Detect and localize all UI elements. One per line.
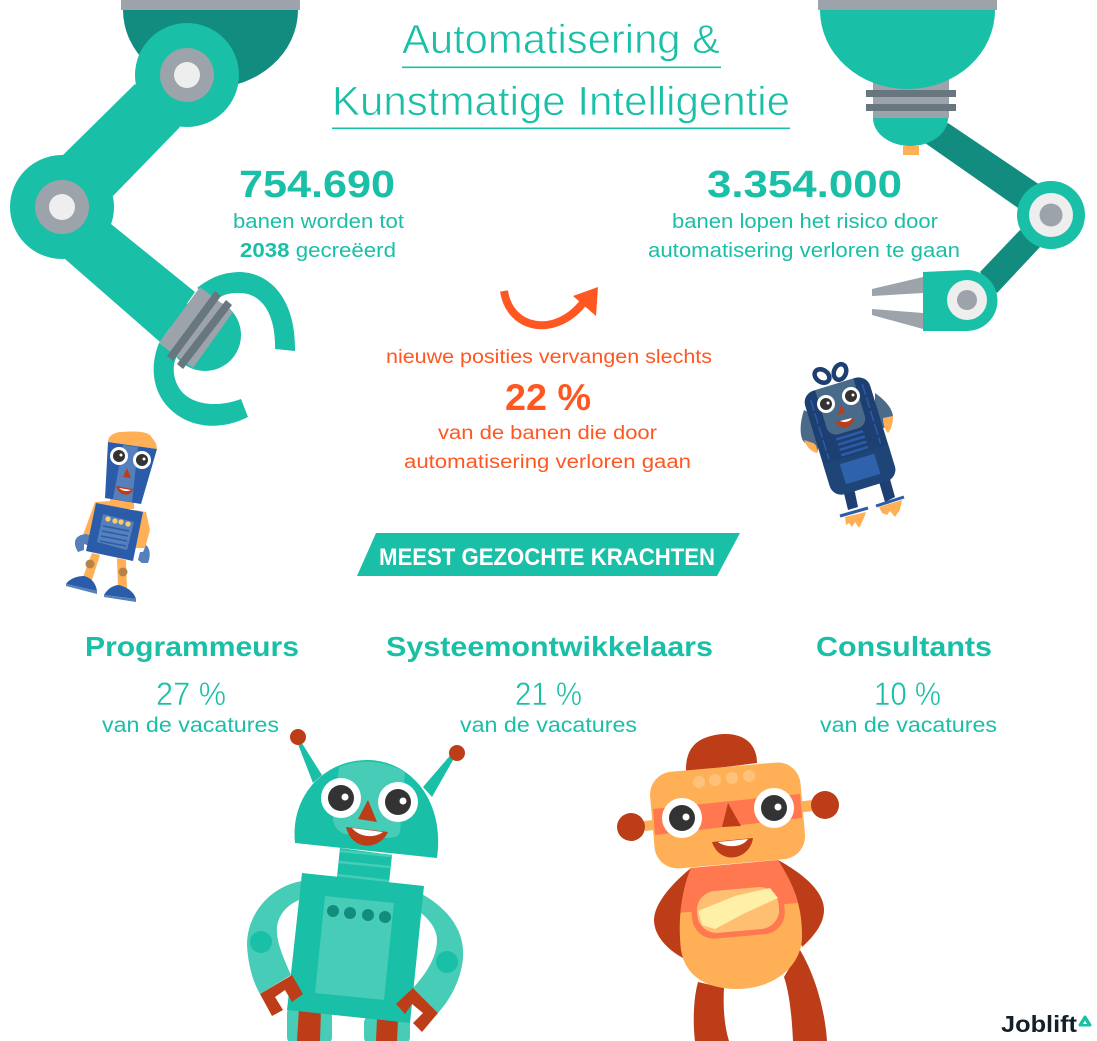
robot: navy <box>801 362 904 528</box>
title: Automatisering & <box>402 16 720 62</box>
banner: most wanted <box>357 533 740 576</box>
title <box>332 16 790 129</box>
stat: programmeurs <box>85 631 299 737</box>
stat: jobs at risk: banen lopen het risico door <box>672 211 938 233</box>
robot: large teal <box>247 729 465 1041</box>
logo: Joblift: Joblift <box>1001 1011 1077 1037</box>
stat: jobs at risk: 3.354.000 <box>707 164 902 206</box>
stat: replacement share: 22 % <box>505 377 591 418</box>
stat: jobs at risk <box>648 164 960 262</box>
title: Kunstmatige Intelligentie <box>332 78 790 124</box>
stat: programmeurs: van de vacatures <box>102 714 279 737</box>
stat: jobs at risk: automatisering verloren te gaan <box>648 240 960 262</box>
robot arm: right <box>818 0 1085 331</box>
stat: consultants: 10 % <box>874 676 941 712</box>
stat: replacement share: nieuwe posities vervangen slechts <box>386 347 712 368</box>
stat: jobs created: 754.690 <box>239 164 395 206</box>
banner: most wanted: MEEST GEZOCHTE KRACHTEN <box>379 544 715 571</box>
stat: replacement share: automatisering verloren gaan <box>404 452 691 473</box>
stat: jobs created <box>233 164 404 262</box>
stat: systeemontwikkelaars: van de vacatures <box>460 714 637 737</box>
robot arm: left <box>10 0 300 426</box>
stat: systeemontwikkelaars: Systeemontwikkelaars <box>386 631 713 662</box>
stat: replacement share: van de banen die door <box>438 423 658 444</box>
stat: replacement share <box>386 347 712 473</box>
stat: jobs created: 2038 gecreëerd <box>240 240 396 262</box>
icon: curved arrow <box>504 287 598 325</box>
stat: systeemontwikkelaars: 21 % <box>515 676 582 712</box>
stat: consultants: Consultants <box>816 631 992 662</box>
stat: programmeurs: Programmeurs <box>85 631 299 662</box>
stat: programmeurs: 27 % <box>156 676 226 712</box>
robot: large orange <box>617 734 839 1041</box>
robot: small blue <box>66 432 157 602</box>
stat: consultants <box>816 631 997 737</box>
stat: systeemontwikkelaars <box>386 631 713 737</box>
stat: consultants: van de vacatures <box>820 714 997 737</box>
stat: jobs created: banen worden tot <box>233 211 404 233</box>
